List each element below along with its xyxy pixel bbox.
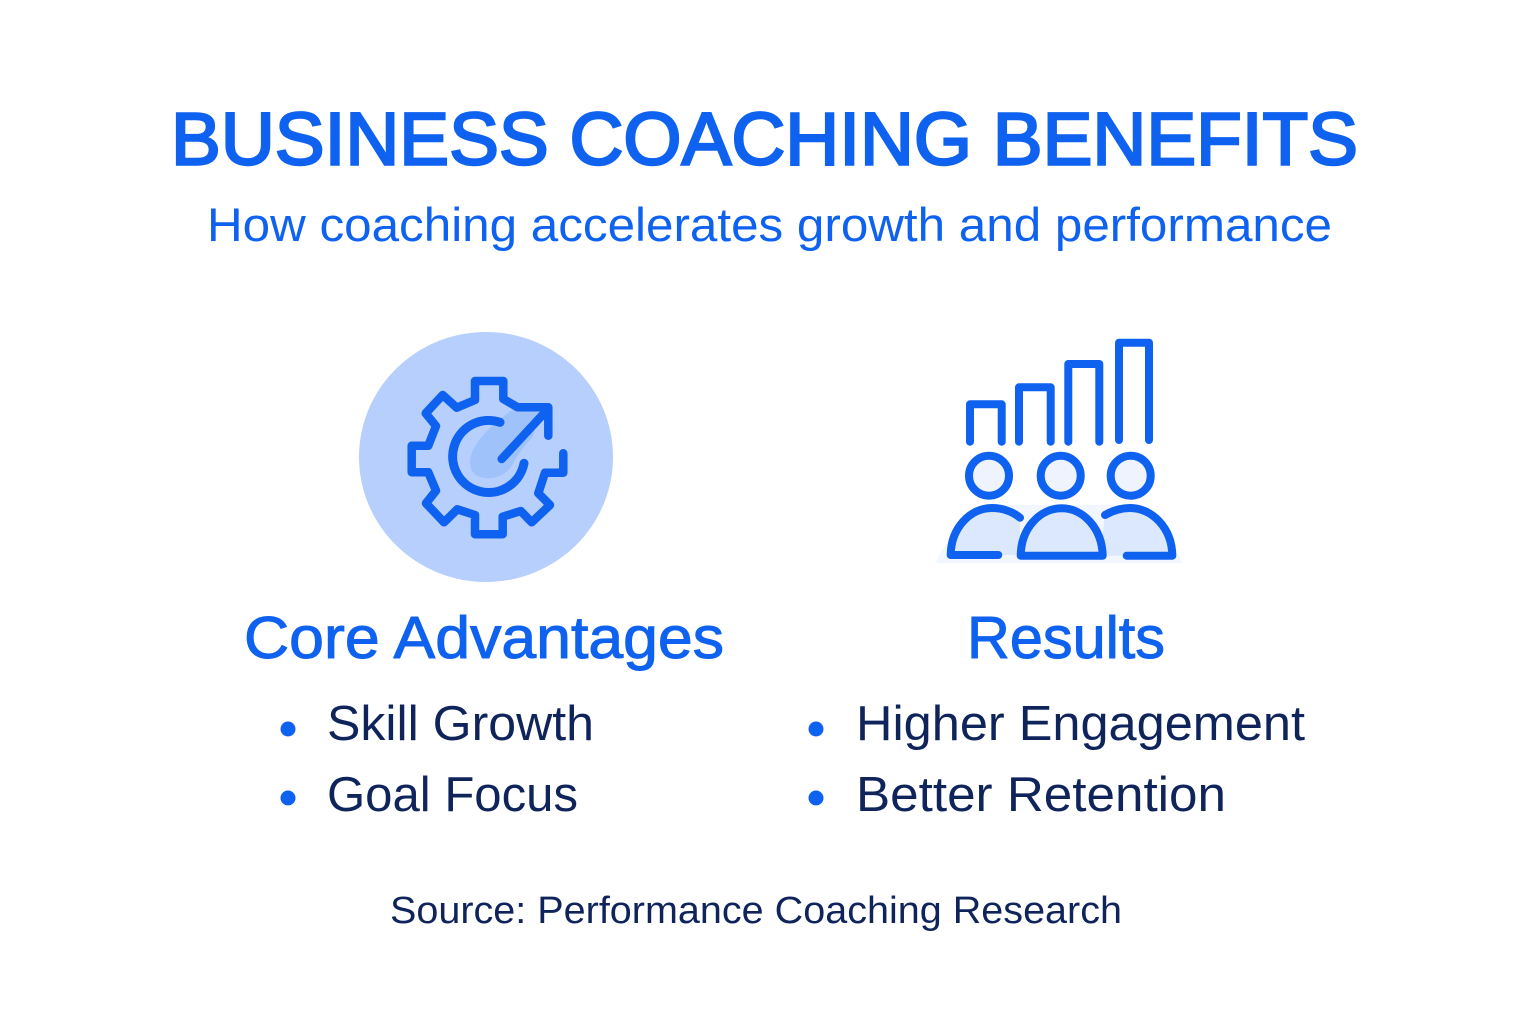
list: results: Higher Engagement [856, 697, 1305, 751]
panel: core advantages [244, 332, 724, 822]
heading: results: Results [967, 605, 1165, 671]
heading: core advantages: Core Advantages [244, 605, 724, 671]
list: core advantages: Goal Focus [327, 768, 578, 822]
subtitle: How coaching accelerates growth and performance [207, 198, 1332, 251]
icon: bar chart above team [936, 343, 1182, 563]
list: results: Better Retention [856, 768, 1226, 822]
panel: results [808, 343, 1305, 822]
title: BUSINESS COACHING BENEFITS [171, 98, 1358, 180]
list: results [808, 697, 1305, 822]
list: core advantages: Skill Growth [327, 697, 594, 751]
list: core advantages [280, 697, 594, 822]
source note: Source: Performance Coaching Research [390, 890, 1122, 932]
icon: gear with arrow [359, 332, 613, 582]
